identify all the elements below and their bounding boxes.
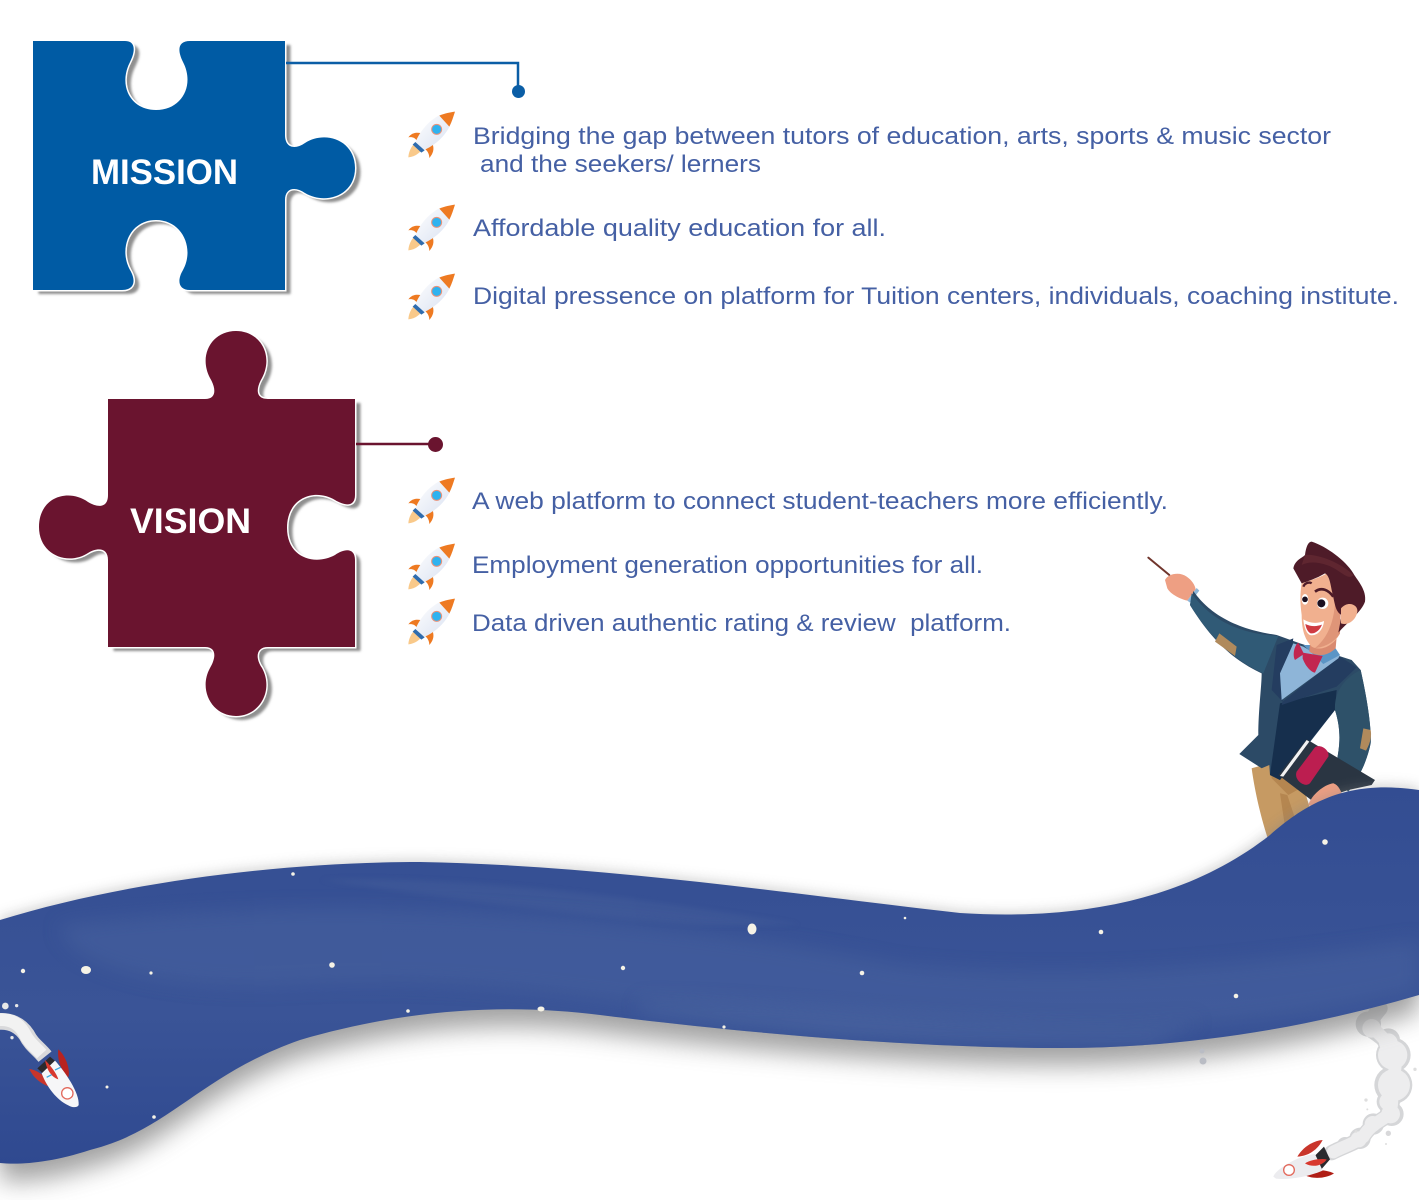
pointer stick [1148, 558, 1169, 575]
mission text 1: and the seekers/ lerners [480, 151, 761, 178]
rocket: bottom right with smoke [1273, 1008, 1417, 1179]
puzzle piece: mission [33, 41, 360, 294]
lower hand [1308, 783, 1342, 808]
icon: rocket bullet 1 [408, 112, 455, 158]
stars [21, 839, 1328, 1119]
hand [1165, 574, 1196, 601]
icon: rocket bullet 6 [408, 599, 455, 645]
smoke trail [1332, 1008, 1417, 1153]
connector: vision [356, 437, 443, 452]
heading: vision: VISION [130, 502, 251, 541]
head [1293, 542, 1365, 655]
cuff [1187, 588, 1199, 603]
trousers [1252, 763, 1310, 840]
shirt [1280, 643, 1340, 700]
puzzle piece: vision [39, 331, 360, 720]
mission text 2: Affordable quality education for all. [473, 215, 886, 242]
mission text 3: Digital pressence on platform for Tuition centers, individuals, coaching institute. [473, 283, 1399, 310]
icon: rocket bullet 3 [408, 274, 455, 320]
book [1278, 739, 1375, 802]
collar [1303, 645, 1340, 664]
vision text 1: A web platform to connect student-teachers more efficiently. [472, 488, 1168, 515]
icon: rocket bullet 5 [408, 544, 455, 590]
heading: mission: MISSION [91, 153, 238, 192]
smoke trail [0, 1003, 45, 1057]
icon: rocket bullet 2 [408, 205, 455, 251]
wave band [0, 787, 1419, 1164]
vision text 2: Employment generation opportunities for all. [472, 552, 983, 579]
connector: mission [286, 63, 525, 98]
character: teacher pointing [1148, 542, 1375, 840]
rocket: left on wave [0, 1003, 79, 1107]
mission text 1 [473, 123, 1331, 178]
jacket [1190, 591, 1371, 792]
icon: rocket bullet 4 [408, 478, 455, 524]
bow tie [1294, 643, 1323, 673]
mission text 1: Bridging the gap between tutors of education, arts, sports & music sector [473, 123, 1331, 150]
vision text 3: Data driven authentic rating & review platform. [472, 610, 1011, 637]
wave shadow [0, 784, 1419, 1182]
